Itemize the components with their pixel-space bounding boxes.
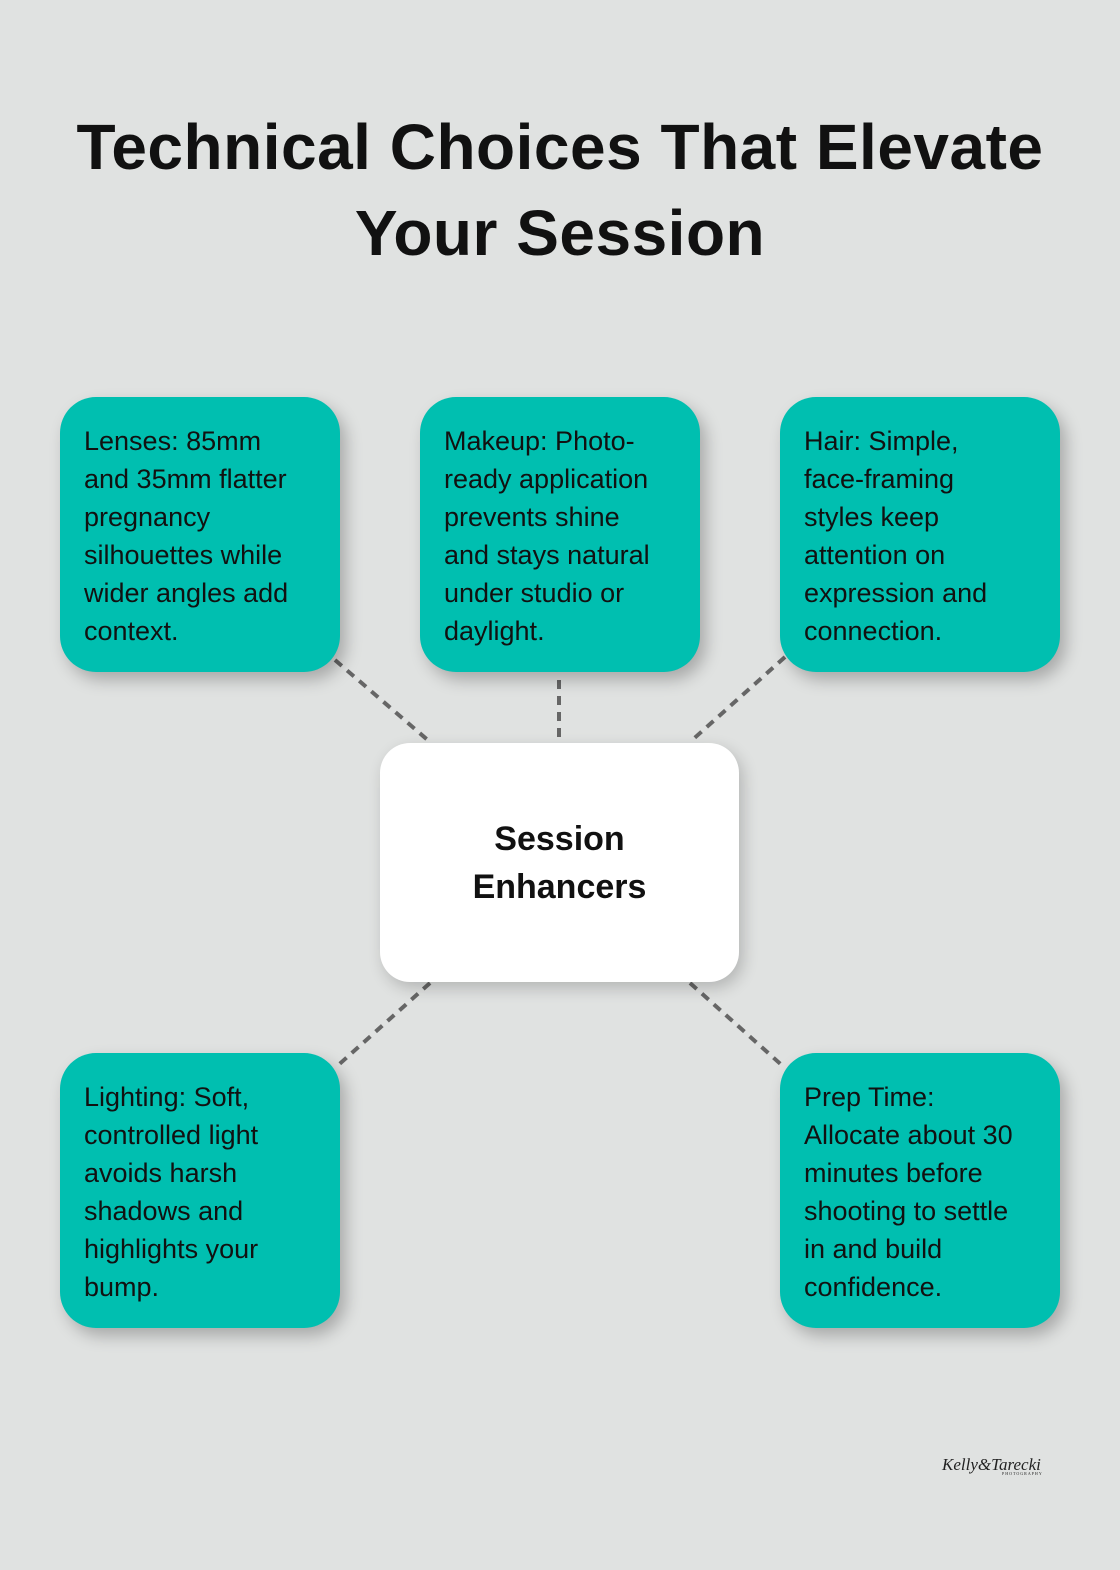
panel: prep time — [780, 1053, 1060, 1328]
signature logo: PHOTOGRAPHY — [1002, 1471, 1043, 1476]
panel: hair: attention on — [804, 540, 945, 570]
panel: makeup: under studio or — [444, 578, 624, 608]
panel: lenses: context. — [84, 616, 179, 646]
panel: lighting — [60, 1053, 340, 1328]
panel: hair: expression and — [804, 578, 987, 608]
signature logo: Kelly&Tarecki — [942, 1455, 1041, 1474]
panel: prep time: in and build — [804, 1234, 942, 1264]
title — [76, 111, 1044, 269]
title: Technical Choices That Elevate — [76, 111, 1044, 183]
panel: makeup: ready application — [444, 464, 648, 494]
panel: lighting: shadows and — [84, 1196, 243, 1226]
panel: makeup: daylight. — [444, 616, 545, 646]
title: Your Session — [355, 197, 765, 269]
panel: hair: styles keep — [804, 502, 939, 532]
panel: prep time: shooting to settle — [804, 1196, 1008, 1226]
panel: lighting: controlled light — [84, 1120, 258, 1150]
panel: lighting: highlights your — [84, 1234, 258, 1264]
panel: lighting: Lighting: Soft, — [84, 1082, 249, 1112]
panel: hair: face-framing — [804, 464, 954, 494]
panel: lenses: wider angles add — [84, 578, 288, 608]
panel: lighting: avoids harsh — [84, 1158, 237, 1188]
panel: prep time: Prep Time: — [804, 1082, 935, 1112]
panel: hair: connection. — [804, 616, 942, 646]
panel: hair — [780, 397, 1060, 672]
center node — [380, 743, 739, 982]
center node: Session — [494, 820, 625, 858]
panel: makeup — [420, 397, 700, 672]
panel: makeup: Makeup: Photo- — [444, 426, 635, 456]
center node: Enhancers — [473, 868, 646, 906]
panel: prep time: Allocate about 30 — [804, 1120, 1013, 1150]
panel: prep time: minutes before — [804, 1158, 983, 1188]
panel: lenses: silhouettes while — [84, 540, 282, 570]
panel: lighting: bump. — [84, 1272, 159, 1302]
panel: makeup: and stays natural — [444, 540, 650, 570]
panel: lenses: and 35mm flatter — [84, 464, 287, 494]
panel: hair: Hair: Simple, — [804, 426, 959, 456]
panel: lenses: Lenses: 85mm — [84, 426, 261, 456]
panel: lenses — [60, 397, 340, 672]
panel: lenses: pregnancy — [84, 502, 210, 532]
panel: makeup: prevents shine — [444, 502, 620, 532]
panel: prep time: confidence. — [804, 1272, 942, 1302]
